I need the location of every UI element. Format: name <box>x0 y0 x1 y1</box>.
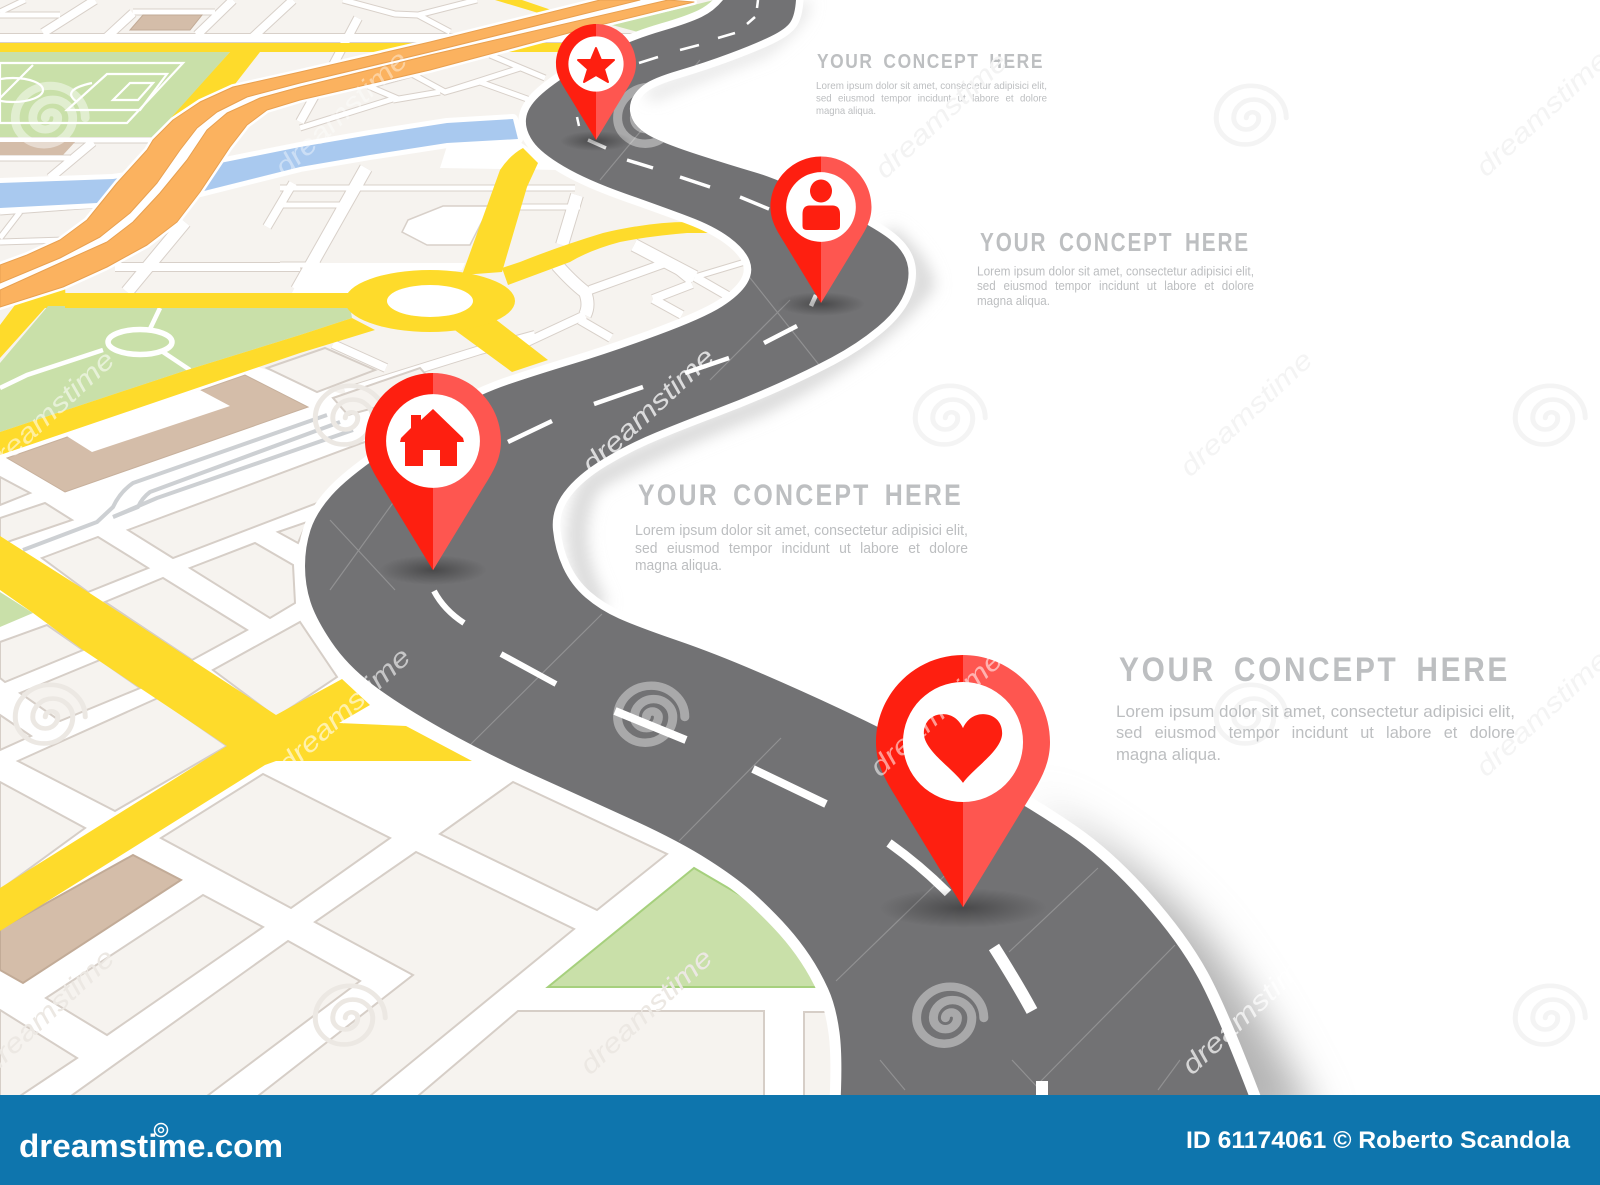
motorway upper lane <box>0 0 640 283</box>
body: magna aliqua. <box>977 294 1050 308</box>
body: Lorem ipsum dolor sit amet, consectetur adipisici elit, <box>1116 702 1515 721</box>
body: magna aliqua. <box>635 557 722 574</box>
street blocks <box>0 348 850 1096</box>
pin 2: person <box>770 156 872 316</box>
green triangle park <box>548 868 850 987</box>
road watermark spiral 1 <box>618 686 685 743</box>
yellow avenue with curve to the top <box>0 43 562 120</box>
pale watermark spirals <box>15 86 1585 1044</box>
body: sed eiusmod tempor incidunt ut labore et dolore <box>635 540 968 557</box>
heart icon <box>924 714 1002 783</box>
bottom banner <box>0 1095 1600 1185</box>
body: magna aliqua. <box>816 105 876 117</box>
text block 1 <box>816 51 1047 117</box>
body: sed eiusmod tempor incidunt ut labore et dolore <box>1116 723 1515 742</box>
diagonal dreamstime watermarks: dreamstime <box>1174 345 1318 482</box>
body: Lorem ipsum dolor sit amet, consectetur adipisici elit, <box>635 522 968 539</box>
heading: YOUR CONCEPT HERE <box>1119 651 1510 689</box>
body: Lorem ipsum dolor sit amet, consectetur adipisici elit, <box>816 80 1047 92</box>
road grid lines <box>330 60 1180 1090</box>
banner bar <box>0 1095 1600 1185</box>
white ground below avenue <box>0 367 370 470</box>
blue river <box>0 119 518 208</box>
top green strip <box>612 0 712 32</box>
diagonal dreamstime watermarks: dreamstime <box>272 642 416 779</box>
diagonal dreamstime watermarks: dreamstime <box>1470 645 1600 782</box>
lane dashes <box>434 0 1042 1096</box>
large yellow road lower left <box>0 536 472 931</box>
road watermark spiral 2 <box>917 987 984 1044</box>
body: sed eiusmod tempor incidunt ut labore et dolore <box>977 279 1254 293</box>
pin body <box>770 156 872 303</box>
map base blocks <box>0 0 744 394</box>
sports park <box>0 52 230 137</box>
road watermark spiral 3 <box>613 82 664 148</box>
motorway lower lane <box>0 0 694 307</box>
star icon <box>578 48 614 82</box>
motorway white envelope <box>0 0 694 307</box>
diagonal dreamstime watermarks: dreamstime <box>864 645 1008 782</box>
text block 4 <box>1116 651 1515 764</box>
city map background <box>0 0 850 1096</box>
heading: YOUR CONCEPT HERE <box>980 227 1250 257</box>
white notch lot <box>440 142 560 170</box>
diagonal dreamstime watermarks: dreamstime <box>869 47 1013 184</box>
white lot wedge <box>292 263 465 293</box>
body: sed eiusmod tempor incidunt ut labore et dolore <box>816 92 1047 104</box>
white hexagon lot <box>402 206 490 245</box>
pin body <box>365 373 501 570</box>
yellow roundabout and roads <box>0 148 715 455</box>
road drop shadow <box>577 1 1318 1125</box>
small green corner <box>0 592 33 627</box>
pin 1: star <box>556 24 636 151</box>
pin 3: house <box>365 373 501 585</box>
body: magna aliqua. <box>1116 745 1221 764</box>
heading: YOUR CONCEPT HERE <box>638 479 963 512</box>
white streets with outlines <box>0 0 745 392</box>
wider near border <box>372 684 1255 1112</box>
body <box>816 80 1047 117</box>
text block 2 <box>977 227 1254 308</box>
pin body <box>876 655 1050 907</box>
image credit: ID 61174061 © Roberto Scandola <box>1186 1127 1571 1154</box>
logo spiral <box>154 1124 168 1136</box>
body <box>977 264 1254 308</box>
top brown lot <box>130 15 202 30</box>
pin body <box>556 24 636 140</box>
left yellow junction <box>0 285 66 358</box>
small brown lot <box>0 142 75 155</box>
diagonal dreamstime watermarks: dreamstime <box>1176 943 1320 1080</box>
brown block with white court <box>7 375 308 492</box>
house icon <box>400 409 464 466</box>
heading: YOUR CONCEPT HERE <box>817 51 1044 73</box>
body <box>635 522 968 574</box>
asphalt <box>305 0 1255 1112</box>
logo text: dreamstime.com <box>19 1128 283 1164</box>
railway <box>23 415 353 550</box>
diagonal dreamstime watermarks: dreamstime <box>269 45 413 182</box>
pin shadow <box>879 888 1047 928</box>
winding road <box>305 0 1255 1112</box>
pin 4: heart <box>876 655 1050 928</box>
orange motorway <box>0 0 694 307</box>
brown lot lower left <box>0 855 181 983</box>
road white border <box>305 0 1255 1112</box>
pin shadow <box>560 131 632 151</box>
pin shadow <box>379 555 487 585</box>
body <box>1116 702 1515 764</box>
diagonal dreamstime watermarks: dreamstime <box>1470 45 1600 182</box>
text block 3 <box>635 479 968 574</box>
pin shadow <box>777 292 865 316</box>
body: Lorem ipsum dolor sit amet, consectetur adipisici elit, <box>977 264 1254 278</box>
person icon <box>802 180 840 230</box>
diagonal dreamstime watermarks: dreamstime <box>576 342 720 479</box>
watermark: spirals and lines on road <box>330 60 1180 1090</box>
lower green park <box>0 306 352 432</box>
diagonal dreamstime watermarks: dreamstime <box>574 943 718 1080</box>
small yellow road at top <box>495 0 550 12</box>
